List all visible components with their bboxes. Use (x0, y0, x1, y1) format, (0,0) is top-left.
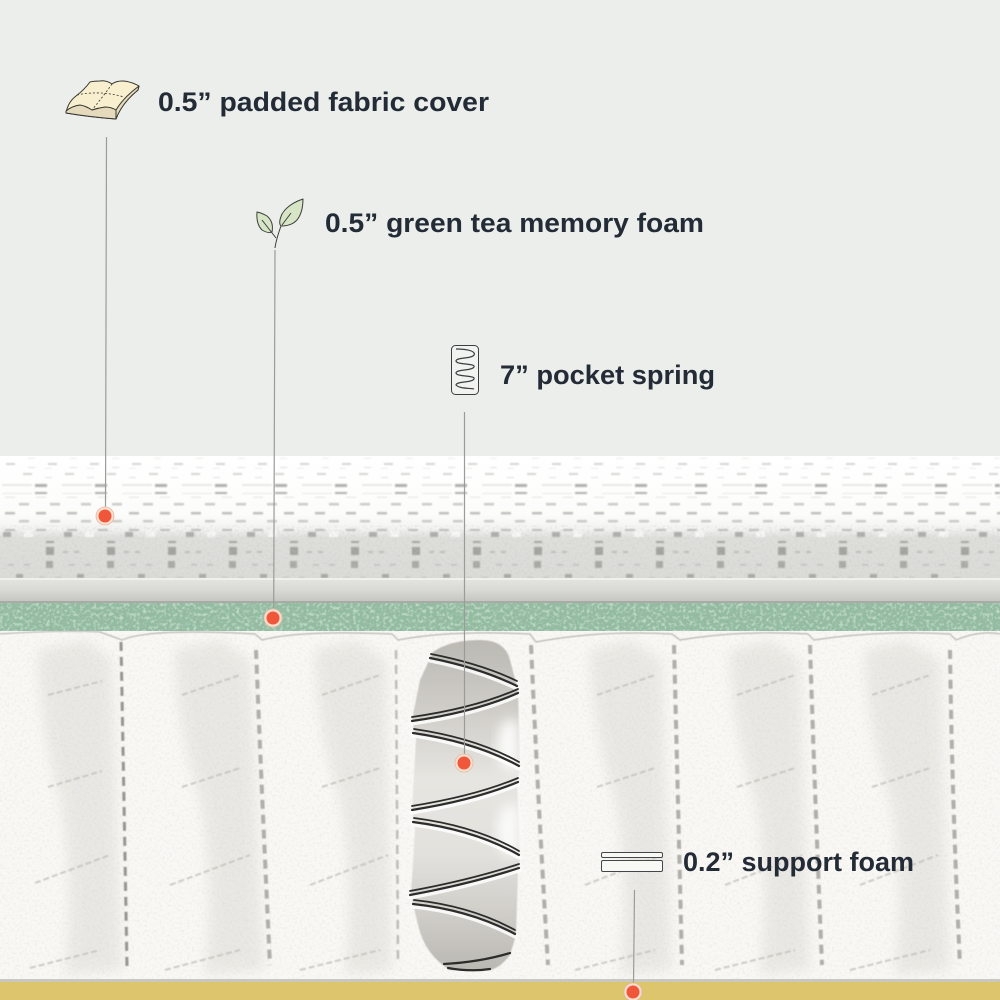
marker: pocket spring (455, 754, 473, 772)
pocket shading (38, 640, 950, 975)
panel: mattress cross-section (0, 456, 1000, 1000)
marker: memory foam (264, 609, 282, 627)
spring window (410, 640, 520, 970)
heading: memory foam: 0.5” green tea memory foam (325, 208, 704, 238)
leader line: pocket spring (464, 412, 466, 755)
heading: support foam: 0.2” support foam (683, 847, 914, 877)
icon: padded fabric (66, 81, 139, 119)
icon: foam layers (602, 852, 662, 872)
icon: spring (452, 346, 478, 394)
icon: leaves (257, 199, 303, 248)
leader line: fabric cover (106, 137, 107, 507)
layer: green tea memory foam (0, 603, 1000, 631)
pocket scribbles (30, 675, 938, 970)
layer: padded fabric cover (0, 456, 1000, 603)
layer: pocket springs (0, 631, 1000, 982)
heading: fabric cover: 0.5” padded fabric cover (158, 87, 490, 117)
spring coils (410, 654, 519, 970)
heading: pocket spring: 7” pocket spring (500, 360, 715, 390)
layer: support foam (0, 979, 1000, 1000)
pocket seams (121, 642, 960, 968)
leader line: memory foam (274, 250, 275, 608)
pocket top fold (0, 631, 1000, 642)
leader line: support foam (634, 890, 635, 984)
pocket texture (0, 631, 1000, 982)
marker: fabric cover (96, 507, 114, 525)
marker: support foam (624, 983, 642, 1000)
